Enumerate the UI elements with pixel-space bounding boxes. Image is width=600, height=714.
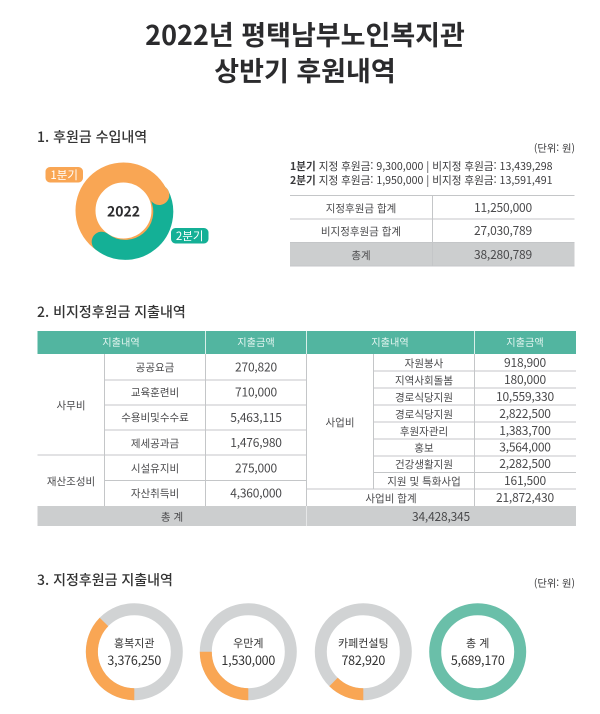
right table rows: 161,500 [504,472,546,489]
right table rows: 1,383,700 [499,422,551,439]
quarterly breakdown text: 2분기 지정 후원금: 1,950,000 | 비지정 후원금: 13,591,491 [290,173,553,188]
ring: 홍복지관: 홍복지관 [114,635,155,651]
title: 2022년 평택남부노인복지관 [145,14,465,53]
quarterly breakdown text [290,159,553,188]
left table rows: 5,463,115 [230,409,282,426]
right table rows: 지역사회돌봄 [395,373,453,388]
heading: section 3: 3. 지정후원금 지출내역 [37,570,173,590]
heading: section 1: 1. 후원금 수입내역 [37,127,147,147]
right table rows: 2,282,500 [499,455,551,472]
left table rows: 사무비 [57,398,85,413]
table: donation totals: 비지정후원금 합계 [321,224,401,239]
ring: 총계: 5,689,170 [451,650,505,669]
left table rows: 710,000 [235,384,277,400]
ring: 총계: 총 계 [466,635,489,651]
left table rows [47,358,282,502]
ring: 우만계 [206,609,291,694]
right table rows: 지원 및 특화사업 [387,474,461,489]
table: donation totals: 11,250,000 [474,199,533,216]
table header: 지출금액 [506,334,544,349]
left table rows: 교육훈련비 [131,385,179,400]
left table rows: 수용비및수수료 [121,410,189,425]
unit note: section 3: (단위: 원) [534,575,575,590]
right table rows: 918,900 [504,354,546,371]
ring: 우만계: 우만계 [233,635,263,651]
right table rows: 사업비 [326,415,354,430]
quarterly breakdown text: 1분기 지정 후원금: 9,300,000 | 비지정 후원금: 13,439,298 [290,159,553,174]
right table rows: 21,872,430 [496,489,555,506]
left table rows: 재산조성비 [47,474,95,489]
label: 1st quarter [45,166,84,183]
ring: 홍복지관 [92,609,177,694]
table grid [38,354,576,526]
left table rows: 제세공과금 [131,436,179,451]
ring: 카페컨설팅 [321,609,406,694]
table: donation totals: 지정후원금 합계 [326,201,396,216]
ring: 우만계: 1,530,000 [221,650,275,669]
table: donation totals: 27,030,789 [474,222,532,239]
table: non-designated spending [38,331,576,526]
ring: 총계 [435,609,520,694]
right table rows: 사업비 합계 [365,491,417,506]
table total row [38,506,576,526]
left table rows: 270,820 [235,358,277,376]
right table rows: 경로식당지원 [395,390,453,405]
right table rows: 2,822,500 [499,405,551,422]
unit note: section 1: (단위: 원) [534,140,575,155]
left table rows: 자산취득비 [131,486,179,501]
right table rows [326,354,555,506]
donut chart: 2022 quarterly donations [45,166,209,250]
table total row: 34,428,345 [412,508,471,525]
donut chart: 2022 quarterly donations: 2022 [107,202,140,222]
label: 2nd quarter [170,228,209,244]
right table rows: 홍보 [414,440,434,456]
table header: 지출내역 [102,334,140,349]
left table rows: 4,360,000 [230,484,282,502]
left table rows: 1,476,980 [230,434,282,451]
label: 1st quarter: 1분기 [50,167,78,183]
right table rows: 180,000 [504,371,546,388]
left table rows: 시설유지비 [131,461,179,476]
heading: section 2: 2. 비지정후원금 지출내역 [37,302,186,322]
right table rows: 10,559,330 [496,388,555,405]
right table rows: 건강생활지원 [395,457,453,472]
right table rows: 후원자관리 [400,424,448,439]
left table rows: 공공요금 [136,360,175,375]
right table rows: 경로식당지원 [395,407,453,422]
table header [38,331,576,354]
table: donation totals: 38,280,789 [474,246,532,263]
right table rows: 3,564,000 [499,438,551,456]
ring: 홍복지관: 3,376,250 [107,650,161,669]
ring: 카페컨설팅: 카페컨설팅 [338,635,389,651]
left table rows: 275,000 [235,460,277,476]
table header: 지출내역 [371,334,409,349]
title [145,14,465,89]
label: 2nd quarter: 2분기 [176,228,203,244]
right table rows: 자원봉사 [405,356,444,371]
table header: 지출금액 [237,334,275,349]
table: donation totals [290,196,574,266]
table total row: 총 계 [161,510,183,524]
table: donation totals: 총계 [351,248,371,263]
ring: 카페컨설팅: 782,920 [341,650,385,669]
title: 상반기 후원내역 [214,50,396,89]
